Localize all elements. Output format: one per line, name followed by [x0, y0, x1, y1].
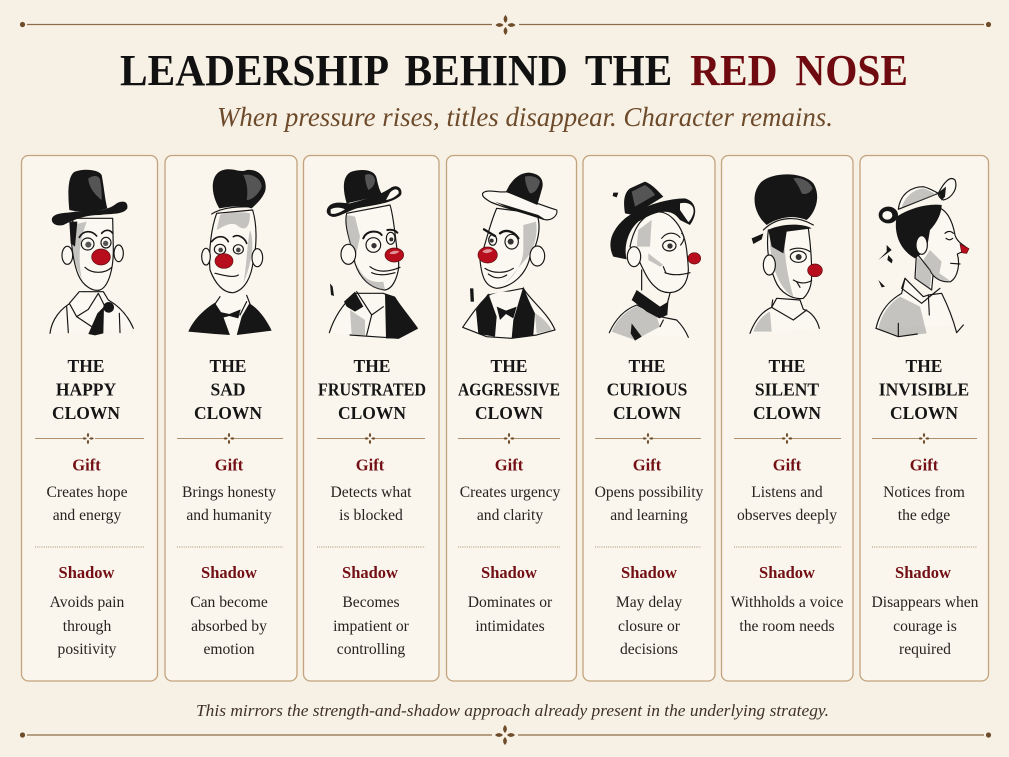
gift text: and energy — [53, 507, 121, 524]
gift label: Gift — [356, 456, 385, 474]
shadow text: Withholds a voice — [731, 594, 843, 611]
heading: CLOWN — [194, 403, 262, 423]
shadow text: absorbed by — [191, 618, 267, 635]
shadow text: closure or — [618, 618, 681, 635]
divider ornament — [317, 433, 425, 444]
panel: the sad clown — [165, 156, 297, 681]
shadow text: positivity — [58, 641, 117, 658]
heading: THE — [491, 356, 527, 376]
shadow label: Shadow — [621, 563, 677, 582]
gift label: Gift — [72, 456, 101, 474]
heading: THE — [906, 356, 942, 376]
gift text: Creates hope — [47, 484, 128, 501]
heading: SAD — [210, 380, 246, 400]
heading: CLOWN — [613, 403, 681, 423]
card background — [446, 156, 576, 681]
gift text: Opens possibility — [595, 484, 704, 501]
shadow text: Dominates or — [468, 594, 553, 611]
gift text: and humanity — [186, 507, 272, 524]
icon: sad clown portrait — [188, 169, 272, 335]
heading: CURIOUS — [607, 380, 687, 400]
gift text: Detects what — [331, 484, 412, 501]
card background — [860, 156, 988, 681]
panel: the aggressive clown — [446, 156, 576, 681]
shadow text: Can become — [190, 594, 268, 611]
gift text: Listens and — [751, 484, 823, 501]
subtitle: When pressure rises, titles disappear. Character remains. — [217, 102, 833, 132]
shadow label: Shadow — [759, 563, 815, 582]
heading: CLOWN — [890, 403, 958, 423]
shadow text: Becomes — [342, 594, 400, 611]
heading: HAPPY — [56, 380, 116, 400]
heading: SILENT — [755, 380, 819, 400]
divider ornament — [595, 433, 701, 444]
shadow text: through — [63, 618, 111, 635]
gift label: Gift — [773, 456, 802, 474]
shadow text: required — [899, 641, 951, 658]
panel: the happy clown — [22, 156, 158, 681]
heading: THE — [769, 356, 805, 376]
heading: CLOWN — [753, 403, 821, 423]
card background — [304, 156, 439, 681]
shadow label: Shadow — [342, 563, 398, 582]
shadow text: controlling — [337, 641, 405, 658]
shadow text: Disappears when — [872, 594, 979, 611]
shadow text: courage is — [893, 618, 957, 635]
title: LEADERSHIP BEHIND THE RED NOSE — [120, 46, 908, 95]
shadow label: Shadow — [895, 563, 951, 582]
heading: CLOWN — [52, 403, 120, 423]
shadow text: emotion — [203, 641, 255, 658]
divider ornament — [177, 433, 283, 444]
shadow text: the room needs — [739, 618, 835, 635]
icon: aggressive clown portrait — [463, 173, 557, 338]
heading: THE — [629, 356, 665, 376]
divider ornament — [458, 433, 560, 444]
icon: happy clown portrait — [50, 170, 133, 335]
heading: THE — [354, 356, 390, 376]
shadow text: May delay — [616, 594, 682, 611]
gift label: Gift — [495, 456, 524, 474]
panel: the invisible clown — [860, 156, 988, 681]
shadow label: Shadow — [201, 563, 257, 582]
top ornamental border — [20, 15, 991, 35]
gift text: is blocked — [339, 507, 403, 524]
shadow text: Avoids pain — [50, 594, 125, 611]
gift label: Gift — [910, 456, 939, 474]
divider ornament — [734, 433, 841, 444]
gift label: Gift — [215, 456, 244, 474]
bottom ornamental border — [20, 725, 991, 745]
card background — [165, 156, 297, 681]
panel: the curious clown — [583, 156, 715, 681]
panel: the silent clown — [722, 156, 853, 681]
shadow label: Shadow — [59, 563, 115, 582]
icon: frustrated clown portrait — [327, 170, 417, 338]
gift text: Brings honesty — [182, 484, 276, 501]
gift label: Gift — [633, 456, 662, 474]
heading: INVISIBLE — [879, 380, 969, 400]
heading: THE — [68, 356, 104, 376]
gift text: the edge — [898, 507, 950, 524]
shadow text: intimidates — [475, 618, 545, 635]
heading: FRUSTRATED — [318, 380, 426, 400]
shadow text: decisions — [620, 641, 678, 658]
heading: THE — [210, 356, 246, 376]
card background — [22, 156, 158, 681]
heading: AGGRESSIVE — [458, 380, 560, 400]
divider ornament — [872, 433, 977, 444]
footer note: This mirrors the strength-and-shadow approach already present in the underlying strategy. — [196, 701, 829, 720]
icon: silent clown portrait — [750, 174, 822, 333]
shadow label: Shadow — [481, 563, 537, 582]
icon: invisible clown portrait — [876, 179, 969, 337]
card background — [583, 156, 715, 681]
icon: curious clown portrait — [609, 182, 701, 341]
shadow text: impatient or — [333, 618, 410, 635]
heading: CLOWN — [475, 403, 543, 423]
gift text: and clarity — [477, 507, 543, 524]
heading: CLOWN — [338, 403, 406, 423]
divider ornament — [35, 433, 144, 444]
gift text: and learning — [610, 507, 688, 524]
gift text: Creates urgency — [460, 484, 560, 501]
gift text: observes deeply — [737, 507, 837, 524]
panel: the frustrated clown — [304, 156, 439, 681]
card background — [722, 156, 853, 681]
gift text: Notices from — [883, 484, 965, 501]
